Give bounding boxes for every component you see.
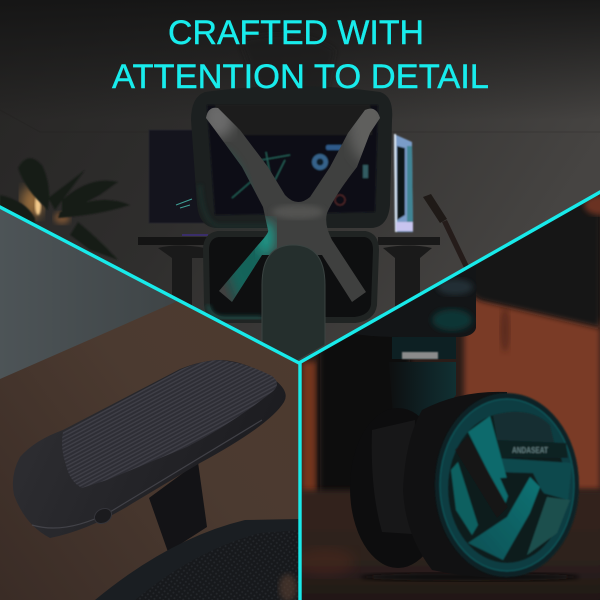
divider lines [0,191,600,600]
panel: armrest closeup [0,200,300,600]
inner mesh left [451,462,478,535]
panel: chair back view [0,0,600,370]
panel: caster wheel closeup [295,180,600,600]
carbon lower right [527,497,570,555]
rear wheel [350,408,422,568]
wall [0,205,180,379]
spoke right [495,458,572,500]
mesh seat back [95,519,300,600]
floor reddish reflection [302,548,352,576]
wall background [14,22,600,361]
desk [138,234,440,245]
headrest [262,68,329,86]
dark upper band [476,203,600,331]
X-shaped spine [206,108,380,302]
chair base [359,276,476,337]
armrest post [149,462,207,552]
wall corner shading [474,132,600,133]
title: ATTENTION TO DETAIL [112,58,489,96]
plant with warm glow [0,158,130,260]
title [112,14,489,96]
brand band [495,440,568,458]
swivel column [392,337,456,416]
middle wheel [372,420,415,534]
center logo [500,477,525,505]
background [310,337,461,397]
chair shading [500,308,510,352]
carbon fibre top [62,360,277,488]
PC case [394,134,413,232]
brand mark: ANDASEAT [512,446,548,455]
guitar [423,194,470,270]
backrest frame [191,86,392,228]
armrest supports [158,246,432,306]
title: CRAFTED WITH [168,14,424,52]
monitor [149,130,209,223]
armrest pad [13,360,286,538]
front wheel face [435,393,579,577]
left red strip [302,362,316,512]
floor [296,490,600,600]
dark mid background [320,330,410,510]
lower frame [206,234,376,320]
front wheel body [419,392,507,574]
side button [94,508,112,524]
backrest mesh with screen glow [207,105,378,215]
carbon top [493,412,555,445]
highlight edge [32,420,262,528]
spoke top [468,416,510,505]
orange chair [464,295,600,490]
wheel shadow [360,573,580,581]
lumbar pad [262,245,325,362]
spoke bottom [468,477,540,560]
floor [0,302,298,600]
